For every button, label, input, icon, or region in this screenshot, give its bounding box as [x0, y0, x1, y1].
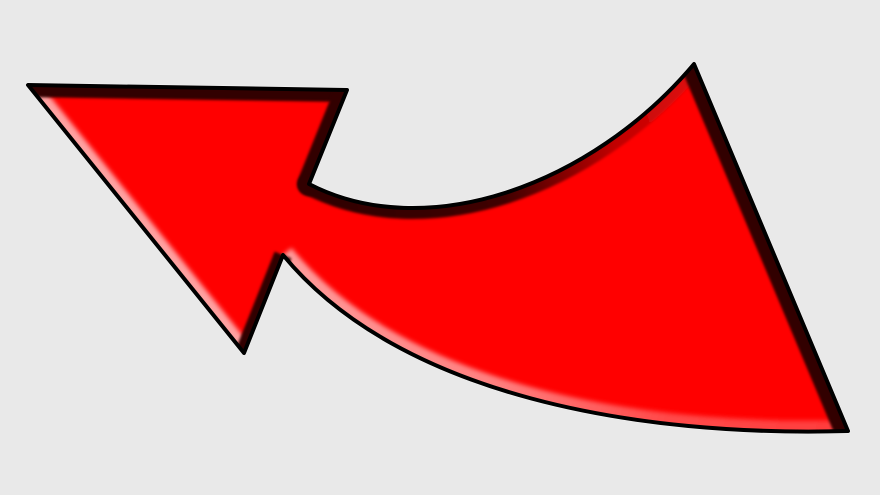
- dark bevel on top edge: [20, 85, 347, 90]
- light bevel on left edge: [39, 95, 243, 344]
- bevel shading: [20, 64, 848, 432]
- light bevel on lower curve: [283, 255, 848, 432]
- red fill: [28, 64, 848, 432]
- dark bevel on lower notch edge: [244, 255, 283, 353]
- black outline: [28, 64, 848, 432]
- soft highlight outside arrow edge: [28, 64, 848, 432]
- dark bevel on right edge: [694, 64, 848, 431]
- illustration: red curved arrow on grey background: [26, 62, 850, 434]
- dark bevel on head notch edge: [309, 90, 347, 184]
- dark bevel on upper curve: [309, 64, 694, 208]
- arrow body: [20, 64, 848, 432]
